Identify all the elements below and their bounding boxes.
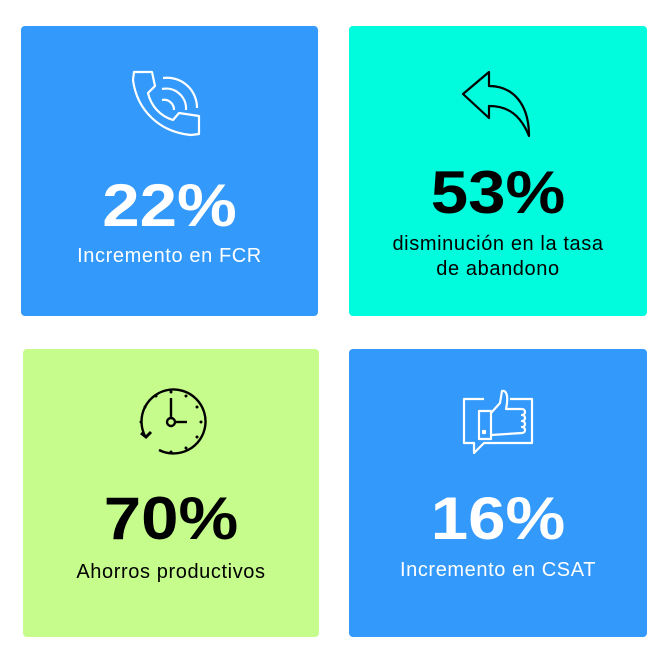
number: 70% [104, 485, 238, 552]
icon: back arrow [462, 70, 530, 138]
label: Ahorros productivos [76, 561, 266, 583]
label: disminución en la tasa [392, 233, 604, 255]
icon: thumbs up [462, 390, 534, 454]
icon: phone [132, 70, 200, 136]
panel: CSAT [349, 349, 647, 637]
panel: abandono [349, 26, 647, 316]
number: 16% [431, 485, 565, 552]
label: Incremento en FCR [77, 245, 262, 267]
label [392, 233, 604, 280]
panel: ahorros [23, 349, 319, 637]
label: de abandono [436, 258, 560, 280]
panel: FCR [21, 26, 318, 316]
icon: clock [140, 388, 207, 455]
label: Incremento en CSAT [400, 559, 596, 581]
number: 53% [431, 159, 565, 226]
number: 22% [102, 172, 237, 239]
